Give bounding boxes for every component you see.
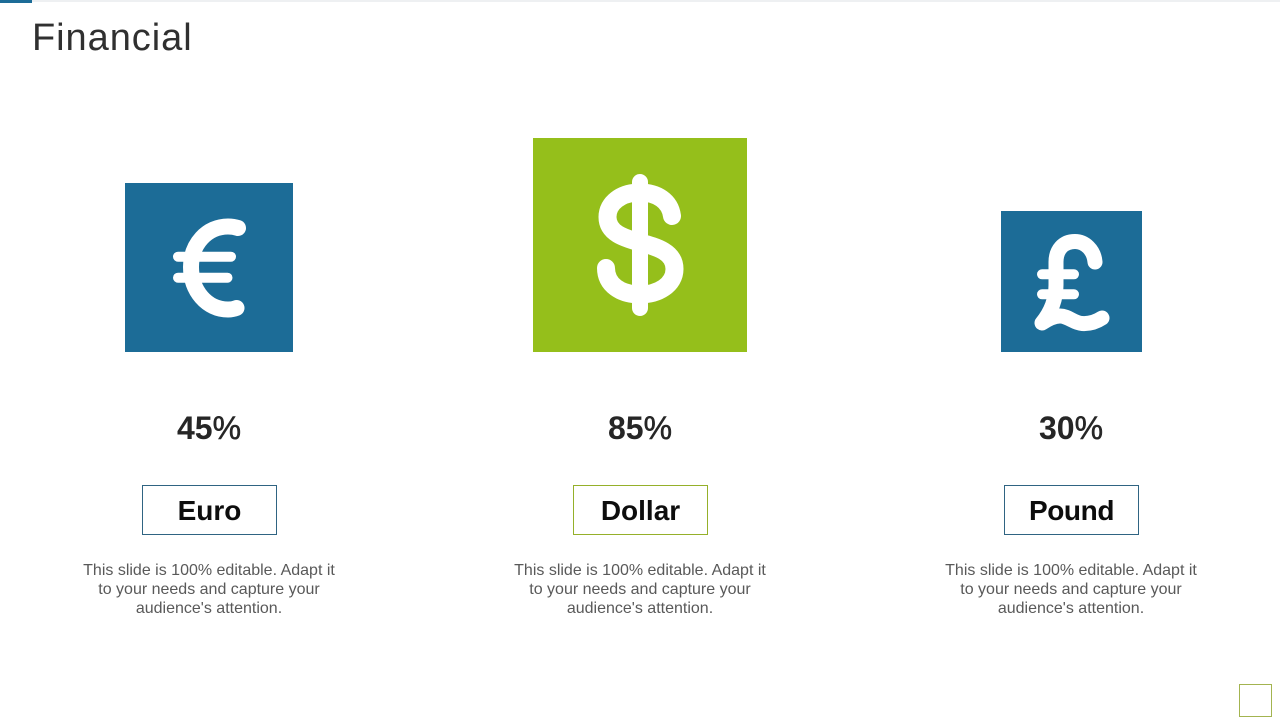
text: dollar description: to your needs and capture your (529, 581, 751, 598)
icon: dollar tile (533, 138, 747, 352)
icon: euro tile (125, 183, 293, 352)
text: euro description (83, 562, 335, 617)
text: dollar description (514, 562, 766, 617)
text: pound description: to your needs and capture your (960, 581, 1182, 598)
text: pound description (945, 562, 1197, 617)
text: pound description: This slide is 100% editable. Adapt it (945, 562, 1197, 579)
top accent tab (0, 0, 32, 3)
label: pound: Pound (1029, 495, 1114, 526)
text: euro description: to your needs and capture your (98, 581, 320, 598)
text: dollar description: This slide is 100% editable. Adapt it (514, 562, 766, 579)
label: dollar: Dollar (601, 495, 680, 526)
text: euro description: audience's attention. (136, 600, 282, 617)
label: dollar (573, 485, 708, 535)
icon: pound tile (1001, 211, 1142, 352)
text: dollar description: audience's attention. (567, 600, 713, 617)
top rule (0, 0, 1280, 2)
text: pound description: audience's attention. (998, 600, 1144, 617)
corner square (1239, 684, 1272, 717)
text: euro description: This slide is 100% editable. Adapt it (83, 562, 335, 579)
title: Financial (32, 17, 193, 59)
value: euro: 45% (177, 410, 241, 446)
label: euro: Euro (178, 495, 241, 526)
value: dollar: 85% (608, 410, 672, 446)
value: pound: 30% (1039, 410, 1103, 446)
label: pound (1004, 485, 1139, 535)
label: euro (142, 485, 277, 535)
